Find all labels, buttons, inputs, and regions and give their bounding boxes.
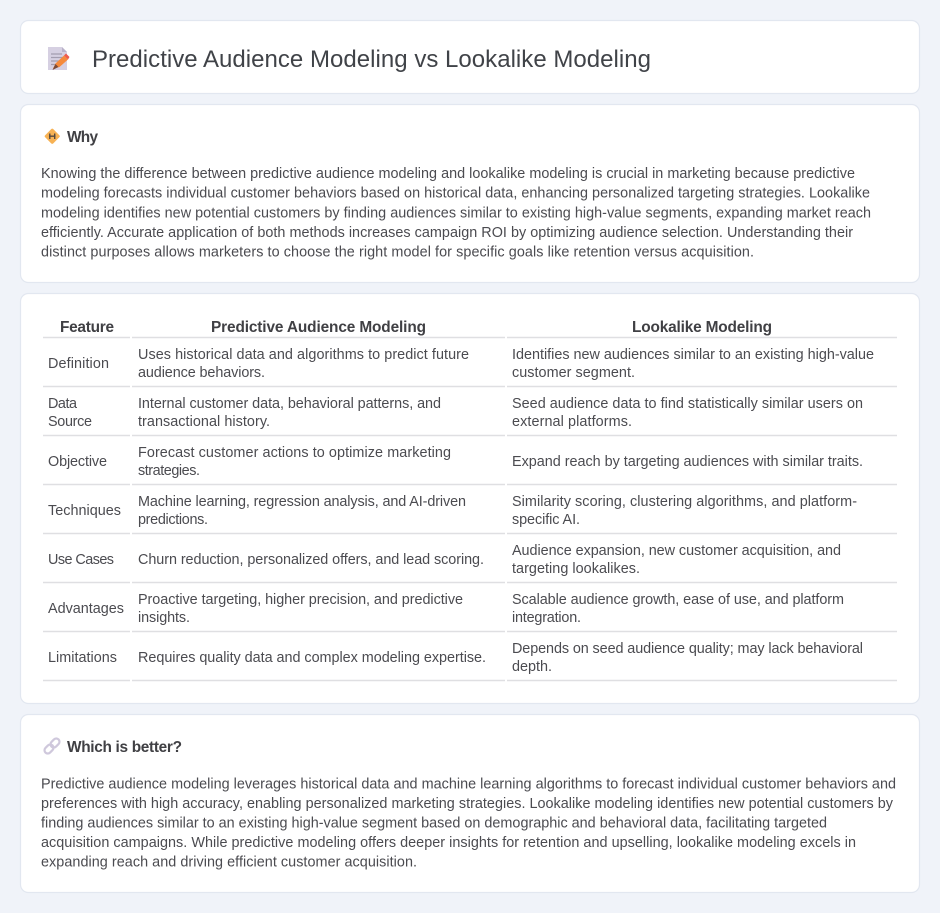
- row: use cases: targeting lookalikes.: [512, 561, 640, 577]
- row: advantages: Scalable audience growth, ease of use, and platform: [512, 592, 844, 608]
- table header row: Lookalike Modeling: [632, 319, 772, 336]
- panel: which is better: [20, 714, 920, 892]
- row: data source: [48, 396, 863, 430]
- panel: comparison table: [20, 294, 920, 704]
- text block: which is better: finding audiences similar to an existing high-value segment based on demographic and behavioral data, facilitating targeted: [41, 816, 827, 832]
- row: techniques: Machine learning, regression analysis, and AI-driven: [138, 494, 466, 510]
- row: objective: Forecast customer actions to optimize marketing: [138, 445, 451, 461]
- row: data source: Data: [48, 396, 77, 412]
- row: techniques: predictions.: [138, 512, 208, 528]
- row: techniques: [48, 494, 857, 528]
- row: definition: [48, 347, 874, 381]
- row: definition: audience behaviors.: [138, 365, 265, 381]
- row: advantages: integration.: [512, 610, 581, 626]
- row: limitations: Depends on seed audience quality; may lack behavioral: [512, 641, 863, 657]
- row: advantages: insights.: [138, 610, 190, 626]
- text block: which is better: expanding reach and driving efficient customer acquisition.: [41, 854, 417, 870]
- row: definition: customer segment.: [512, 365, 635, 381]
- row: advantages: Advantages: [48, 601, 124, 617]
- row: objective: strategies.: [138, 463, 200, 479]
- row: data source: Internal customer data, behavioral patterns, and: [138, 396, 441, 412]
- row: objective: [48, 445, 863, 479]
- text block: why: modeling identifies new potential customers by finding audiences similar to existing high-value segments, expanding market reach: [41, 205, 871, 221]
- table header row: [60, 319, 772, 336]
- icon: memo with pencil: [48, 47, 70, 70]
- icon: orange diamond: [44, 128, 60, 144]
- text block: why: efficiently. Accurate application of both methods increases campaign ROI by optimizing audience selection. Understanding their: [41, 225, 853, 241]
- row: limitations: depth.: [512, 659, 552, 675]
- row: limitations: Limitations: [48, 650, 117, 666]
- heading: why: Why: [67, 129, 98, 146]
- row: techniques: specific AI.: [512, 512, 580, 528]
- row: data source: transactional history.: [138, 414, 270, 430]
- table header row: Feature: [60, 319, 114, 336]
- panel: why: [20, 104, 920, 282]
- row: objective: Objective: [48, 454, 107, 470]
- row: use cases: Audience expansion, new customer acquisition, and: [512, 543, 841, 559]
- text block: why: modeling forecasts individual customer behaviors based on historical data, enhancing personalized targeting strategies. Lookalike: [41, 186, 870, 202]
- panel: header: [20, 20, 920, 94]
- row: data source: Source: [48, 414, 92, 430]
- row: use cases: Use Cases: [48, 552, 114, 568]
- text block: which is better: Predictive audience modeling leverages historical data and machine learning algorithms to forecast individual customer behaviors and: [41, 776, 896, 792]
- text block: which is better: acquisition campaigns. While predictive modeling offers deeper insights for retention and upselling, lookalike modeling excels in: [41, 835, 856, 851]
- text block: why: distinct purposes allows marketers to choose the right model for specific goals like retention versus acquisition.: [41, 245, 754, 261]
- row: data source: Seed audience data to find statistically similar users on: [512, 396, 863, 412]
- row: objective: Expand reach by targeting audiences with similar traits.: [512, 454, 863, 470]
- row: data source: external platforms.: [512, 414, 632, 430]
- text block: why: Knowing the difference between predictive audience modeling and lookalike modeling is crucial in marketing because predictive: [41, 166, 855, 182]
- row: advantages: [48, 592, 844, 626]
- text block: which is better: preferences with high accuracy, enabling personalized marketing strategies. Lookalike modeling identifies new potential customers by: [41, 796, 894, 812]
- row: limitations: [48, 641, 863, 675]
- text block: why: [41, 166, 871, 261]
- title: Predictive Audience Modeling vs Lookalike Modeling: [92, 46, 651, 73]
- icon: link: [43, 737, 61, 755]
- row: definition: Uses historical data and algorithms to predict future: [138, 347, 469, 363]
- heading: which is better: Which is better?: [67, 739, 182, 756]
- row: techniques: Similarity scoring, clustering algorithms, and platform-: [512, 494, 857, 510]
- table header row: Predictive Audience Modeling: [211, 319, 426, 336]
- row: limitations: Requires quality data and complex modeling expertise.: [138, 650, 486, 666]
- row: techniques: Techniques: [48, 503, 121, 519]
- row: advantages: Proactive targeting, higher precision, and predictive: [138, 592, 463, 608]
- row: definition: Identifies new audiences similar to an existing high-value: [512, 347, 874, 363]
- row: use cases: [48, 543, 841, 577]
- row: definition: Definition: [48, 356, 109, 372]
- row: use cases: Churn reduction, personalized offers, and lead scoring.: [138, 552, 484, 568]
- text block: which is better: [41, 776, 896, 870]
